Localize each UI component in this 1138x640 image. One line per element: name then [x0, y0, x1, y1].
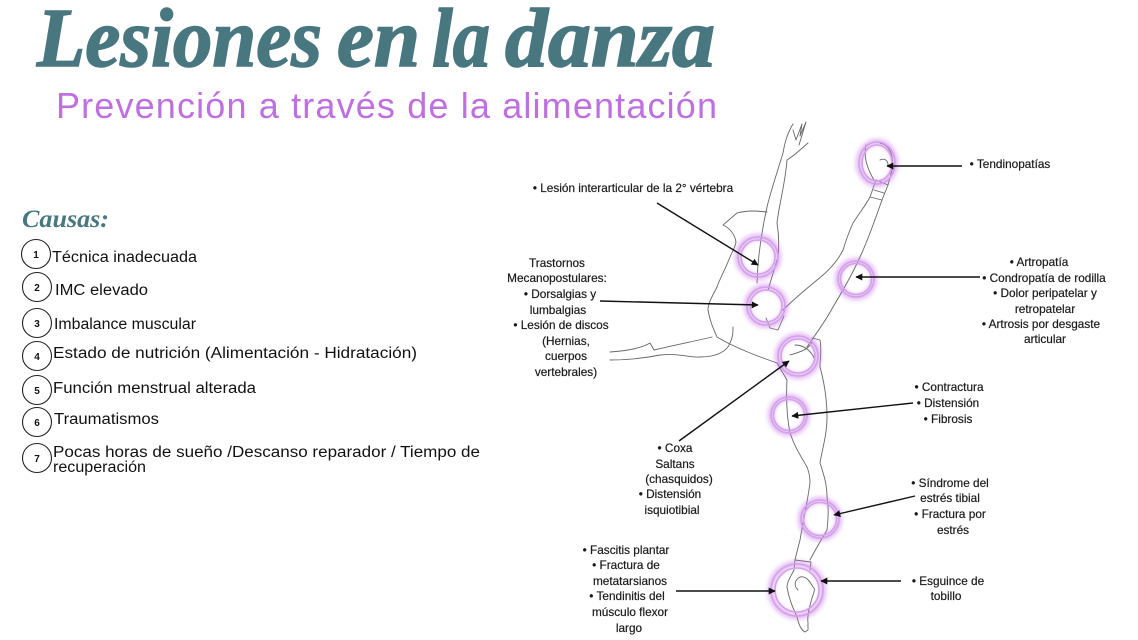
- label: fascitis plantar: • Tendinitis del: [589, 589, 665, 603]
- label: coxa saltans: (chasquidos): [645, 472, 713, 486]
- label: coxa saltans: [639, 441, 713, 517]
- label: fascitis plantar: • Fractura de: [592, 558, 660, 572]
- label: esguince: tobillo: [931, 589, 962, 603]
- circle: ankle: [771, 564, 823, 616]
- cause 1: [22, 240, 197, 268]
- cause 2: 2: [34, 283, 40, 294]
- subtitle: Prevención a través de la alimentación: [56, 85, 717, 126]
- cause 2: [22, 272, 148, 302]
- label: artropatía: • Condropatía de rodilla: [982, 271, 1106, 285]
- label: fascitis plantar: • Fascitis plantar: [583, 543, 669, 557]
- label: trastornos mecanoposturales: • Lesión de discos: [513, 318, 609, 332]
- circle: hip: [778, 336, 818, 376]
- arrow: síndrome tibial: [834, 496, 915, 515]
- cause 5: [22, 376, 256, 404]
- cause 7: Pocas horas de sueño /Descanso reparador / Tiempo de: [53, 444, 480, 461]
- highlight circles: [738, 142, 895, 616]
- arrow: vértebra: [657, 203, 758, 265]
- cause 7: recuperación: [53, 459, 146, 476]
- label: lesión interarticular: • Lesión interarticular de la 2° vértebra: [533, 181, 734, 195]
- label: contractura: • Fibrosis: [924, 412, 972, 426]
- label: síndrome tibial: • Fractura por: [914, 507, 986, 521]
- label: tendinopatías: • Tendinopatías: [970, 157, 1050, 171]
- circle: shin: [801, 500, 839, 538]
- label: artropatía: • Dolor peripatelar y: [993, 286, 1097, 300]
- label: contractura: • Distensión: [917, 396, 979, 410]
- label: síndrome tibial: estrés: [937, 523, 969, 537]
- label: coxa saltans: isquiotibial: [644, 503, 700, 517]
- label: trastornos mecanoposturales: (Hernias,: [542, 334, 590, 348]
- cause 6: [22, 408, 159, 436]
- cause 3: Imbalance muscular: [54, 316, 196, 333]
- cause 3: 3: [34, 319, 40, 330]
- list of causes: [22, 240, 480, 476]
- label: esguince: • Esguince de: [912, 574, 985, 588]
- label: síndrome tibial: [911, 476, 989, 537]
- cause 6: 6: [34, 418, 40, 429]
- label: contractura: [914, 380, 984, 426]
- arrow: coxa saltans: [679, 361, 789, 441]
- label: fascitis plantar: metatarsianos: [593, 574, 667, 588]
- arrow: tendinopatías: [887, 165, 962, 167]
- cause 3: [22, 308, 196, 338]
- label: artropatía: articular: [1024, 332, 1066, 346]
- cause 7: 7: [34, 454, 40, 465]
- label: fascitis plantar: [583, 543, 669, 635]
- arrow: artropatía: [856, 276, 980, 278]
- label: trastornos mecanoposturales: • Dorsalgias y: [524, 287, 596, 301]
- label: trastornos mecanoposturales: [507, 256, 609, 379]
- cause 4: [22, 342, 417, 370]
- cause 4: 4: [34, 352, 40, 363]
- label: esguince: [912, 574, 985, 603]
- cause 5: Función menstrual alterada: [53, 380, 256, 397]
- label: trastornos mecanoposturales: cuerpos: [545, 349, 587, 363]
- label: coxa saltans: • Coxa: [658, 441, 693, 455]
- arrow: contractura: [792, 403, 913, 416]
- label: síndrome tibial: estrés tibial: [920, 491, 980, 505]
- arrow: esguince: [821, 580, 901, 582]
- cause 1: 1: [33, 250, 39, 261]
- label: trastornos mecanoposturales: lumbalgias: [530, 303, 586, 317]
- circle: thigh: [771, 397, 807, 433]
- label: trastornos mecanoposturales: vertebrales): [535, 365, 597, 379]
- label: trastornos mecanoposturales: Trastornos: [529, 256, 585, 270]
- cause 1: Técnica inadecuada: [52, 249, 197, 266]
- label: trastornos mecanoposturales: Mecanopostulares:: [507, 271, 607, 285]
- dancer illustration: [610, 122, 892, 632]
- label: síndrome tibial: • Síndrome del: [911, 476, 989, 490]
- cause 2: IMC elevado: [55, 282, 148, 299]
- label: coxa saltans: Saltans: [655, 457, 695, 471]
- cause 6: Traumatismos: [54, 411, 159, 428]
- label: artropatía: • Artropatía: [1010, 255, 1069, 269]
- title: [36, 0, 715, 85]
- label: fascitis plantar: músculo flexor: [592, 605, 668, 619]
- cause 7: [22, 444, 480, 476]
- arrow: fascitis plantar: [676, 590, 775, 592]
- arrow: trastornos mecanoposturales: [600, 301, 758, 305]
- circle: foot: [859, 142, 895, 184]
- cause 5: 5: [34, 386, 40, 397]
- circle: back: [747, 287, 785, 325]
- label: artropatía: retropatelar: [1015, 302, 1075, 316]
- label: fascitis plantar: largo: [616, 621, 643, 635]
- label: artropatía: • Artrosis por desgaste: [982, 317, 1101, 331]
- label: contractura: • Contractura: [914, 380, 984, 394]
- circle: neck: [738, 237, 778, 277]
- label: artropatía: [982, 255, 1106, 346]
- label: coxa saltans: • Distensión: [639, 487, 701, 501]
- cause 4: Estado de nutrición (Alimentación - Hidratación): [53, 345, 417, 362]
- heading: causas: Causas:: [22, 206, 109, 233]
- circle: knee: [838, 261, 874, 297]
